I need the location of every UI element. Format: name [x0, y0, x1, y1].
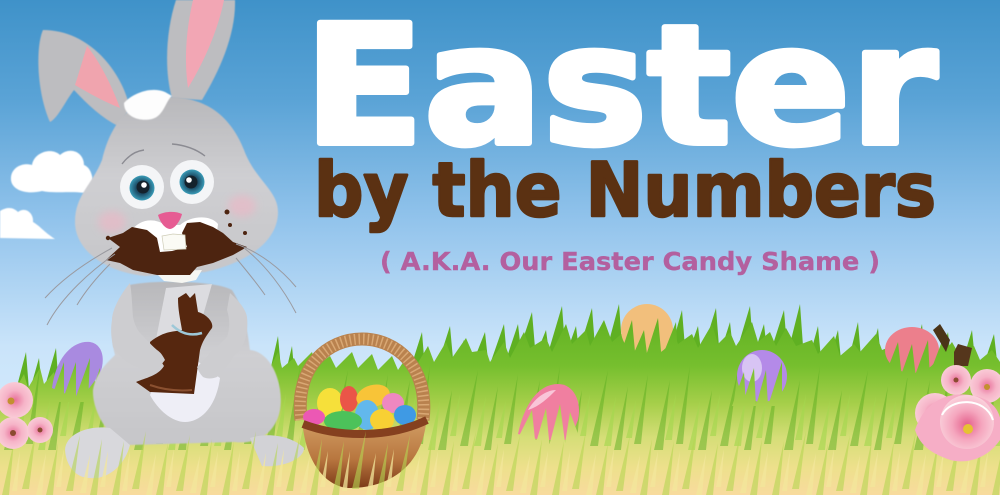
chocolate bunny in grass — [933, 324, 972, 366]
fur fringe under chin — [155, 270, 202, 283]
arms — [111, 283, 247, 378]
basket rim — [303, 420, 427, 434]
left ear — [38, 30, 130, 126]
head — [75, 97, 278, 276]
cloud upper — [11, 151, 93, 194]
muzzle — [130, 217, 218, 252]
flowers left — [0, 382, 53, 449]
chocolate bunny figure — [136, 293, 212, 394]
teeth — [162, 234, 186, 250]
egg: pink right — [884, 327, 946, 378]
nose — [158, 212, 182, 229]
chocolate flecks — [106, 210, 247, 240]
basket handle — [300, 339, 424, 420]
right ear — [167, 0, 235, 100]
egg: orange top — [618, 304, 678, 362]
basket eggs — [303, 381, 416, 431]
egg: pink foreground — [512, 384, 584, 450]
flowers right — [915, 365, 1000, 461]
eyebrows — [122, 144, 205, 164]
left eye — [120, 165, 164, 209]
tagline: ( A.K.A. Our Easter Candy Shame ) — [380, 247, 880, 276]
foreground grass blades — [0, 425, 1000, 495]
grass field — [0, 304, 1000, 495]
egg: purple left — [50, 342, 103, 402]
chocolate smear — [106, 222, 247, 275]
right eye — [170, 160, 214, 204]
basket — [300, 339, 427, 488]
body and legs — [65, 282, 304, 478]
pom tuft — [124, 90, 172, 120]
cheeks — [98, 195, 256, 233]
egg: purple right — [732, 350, 792, 406]
subtitle: by the Numbers: by the Numbers — [314, 146, 936, 234]
cloud lower — [0, 208, 55, 239]
bunny — [38, 0, 304, 478]
basket bowl — [303, 424, 426, 488]
whiskers — [45, 244, 296, 325]
